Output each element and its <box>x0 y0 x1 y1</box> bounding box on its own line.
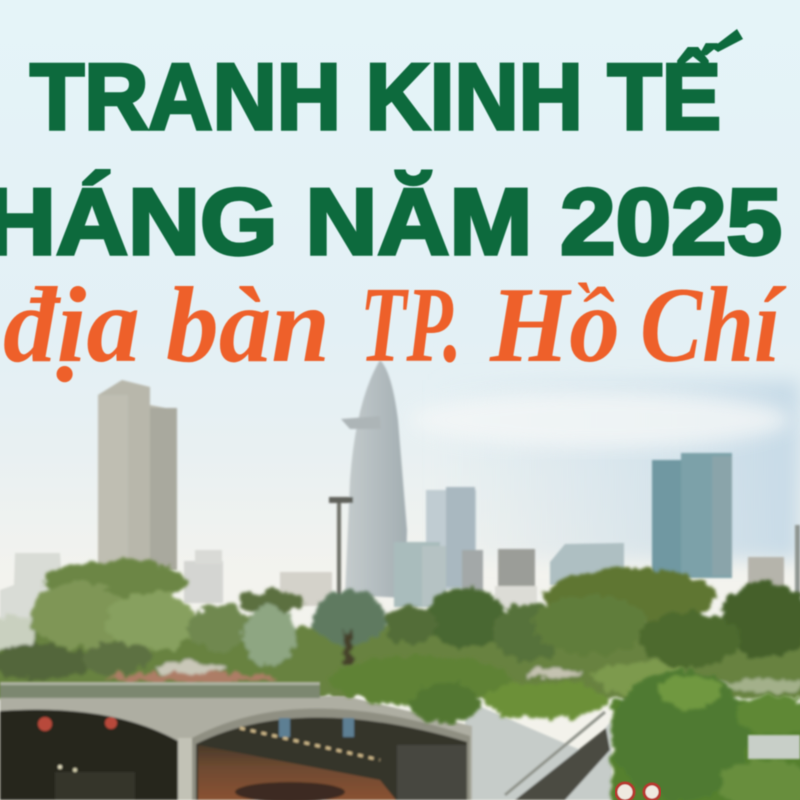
subtitle: Hồ <box>489 266 620 385</box>
title line 1: TRANH KINH TẾ <box>30 44 721 149</box>
subtitle: Chí <box>640 266 787 385</box>
concrete wall <box>0 696 472 800</box>
overpass wall and tunnel <box>0 682 612 800</box>
left tunnel opening <box>0 710 180 800</box>
foreground bushes <box>612 669 800 800</box>
subtitle: TP. <box>360 266 462 385</box>
central pillar <box>178 738 204 800</box>
low building <box>280 572 332 606</box>
skyline buildings <box>0 360 800 620</box>
far right buildings <box>748 525 800 595</box>
left tower <box>98 380 177 570</box>
stairway <box>505 712 610 800</box>
railing <box>0 682 320 698</box>
acute accent on title line 1 <box>712 29 743 52</box>
title <box>0 29 787 385</box>
right retaining wall <box>465 700 612 800</box>
central right buildings <box>495 543 624 610</box>
bridge top foliage <box>330 656 688 723</box>
trees and greenery <box>0 560 800 698</box>
subtitle: bàn <box>166 266 330 385</box>
right glass tower <box>652 453 732 580</box>
mid towers <box>394 487 483 607</box>
road signs <box>616 783 660 800</box>
title line 2: HÁNG NĂM 2025 <box>0 169 782 274</box>
far left building <box>0 553 62 620</box>
subtitle: địa <box>3 266 140 385</box>
Bitexco tower <box>329 360 407 600</box>
small white building <box>184 550 223 603</box>
right tunnel opening <box>192 708 470 800</box>
right wall fragment <box>748 735 800 759</box>
subtitle <box>3 266 787 385</box>
